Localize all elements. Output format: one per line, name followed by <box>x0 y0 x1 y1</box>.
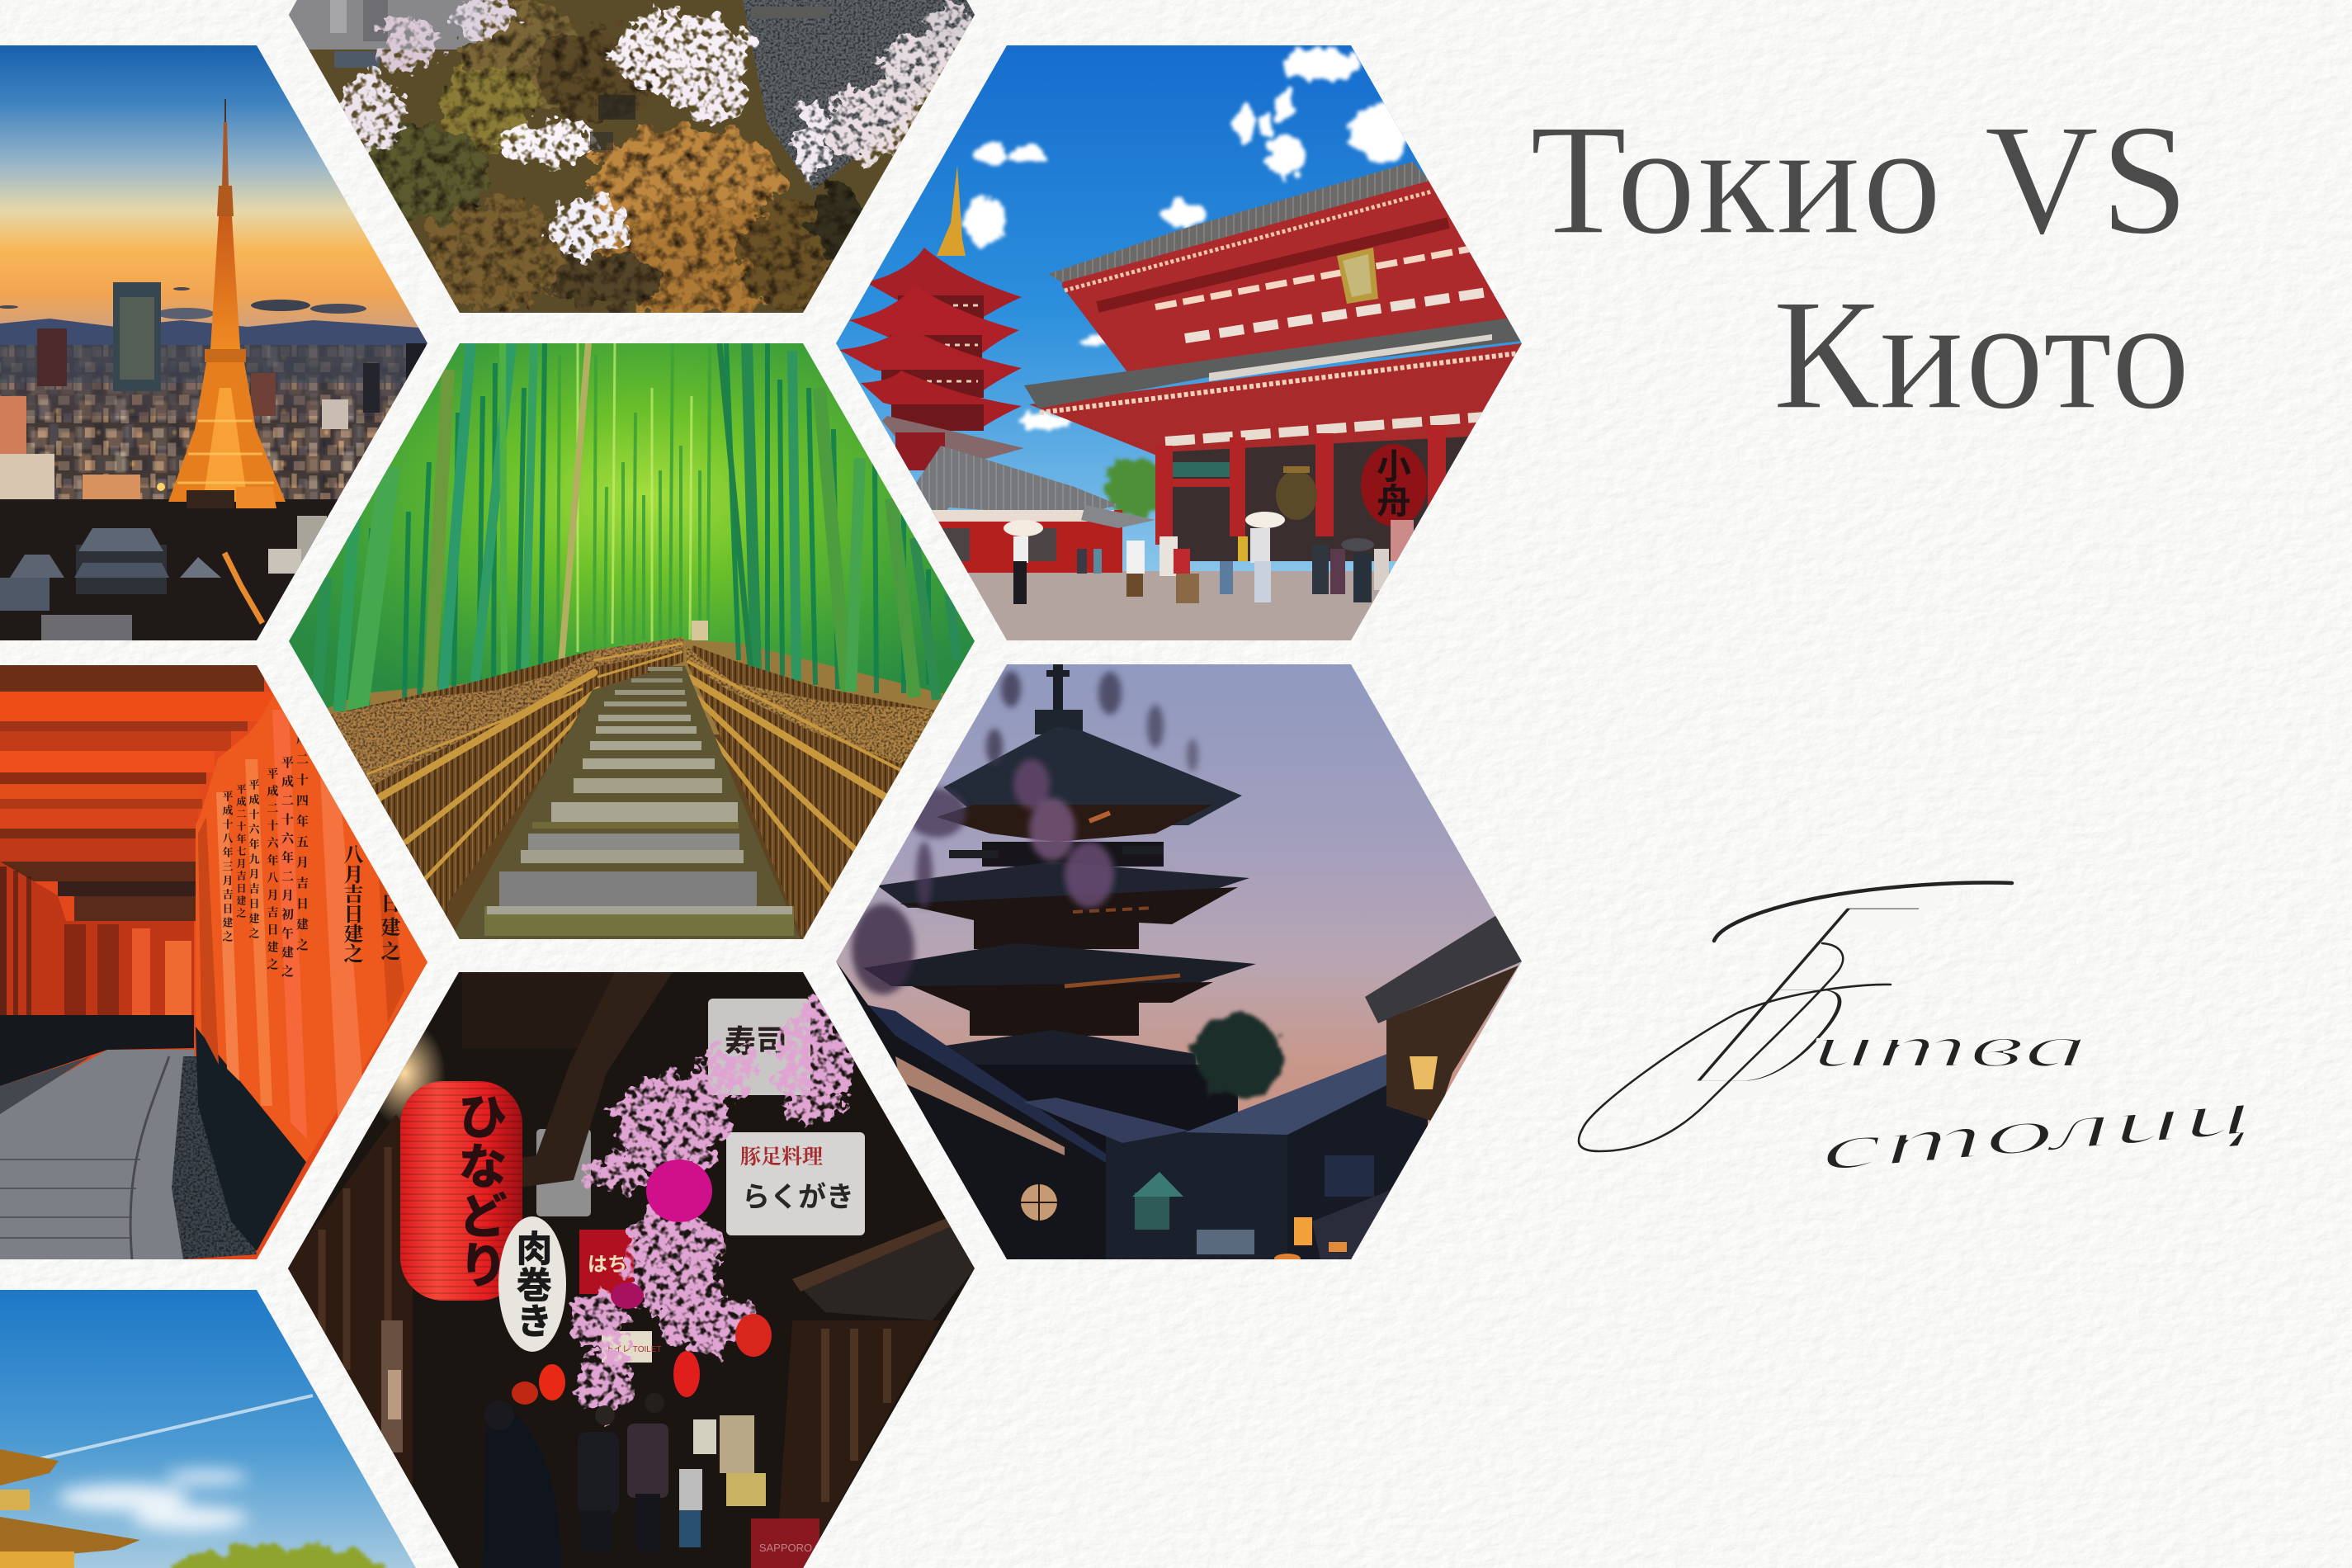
bamboo stalks <box>318 343 957 711</box>
ground behind the stalks <box>285 640 975 743</box>
pillar inscriptions: 日建之 <box>377 893 400 965</box>
hanging signs <box>579 999 865 1363</box>
five-storey pagoda <box>839 165 1024 470</box>
right foreground houses <box>1023 914 1522 1263</box>
contrail and clouds <box>38 1396 313 1530</box>
big red lantern <box>400 1081 522 1301</box>
small shop signs and crate <box>679 1415 819 1568</box>
golden pavilion roofs <box>0 1449 140 1568</box>
right shop awnings and walls <box>776 1217 975 1568</box>
hanging lanterns <box>1276 444 1427 527</box>
main gate, lower roof and body <box>1024 318 1522 561</box>
railing at castle top <box>751 7 829 18</box>
script word one: Б <box>1613 837 2011 1150</box>
dark foreground with temple <box>0 483 338 640</box>
ground <box>966 571 1527 645</box>
stone wall <box>743 0 978 190</box>
script word two: итва <box>1811 1013 2088 1079</box>
stone path <box>0 1050 195 1259</box>
low temple hall <box>914 446 1155 573</box>
treetops <box>173 1547 388 1568</box>
photo hexagon: pagoda street in Kyoto at dusk <box>834 660 1527 1263</box>
right row of gate pillars <box>196 665 427 1251</box>
pillar inscriptions: 平成二十六年八月吉日建之 <box>266 767 279 975</box>
hanging lanterns: 舟 <box>1377 482 1411 521</box>
distant city <box>285 0 483 68</box>
photo hexagon: Arashiyama bamboo path <box>285 338 978 941</box>
photo hexagon: Senso-ji temple in Asakusa <box>834 41 1527 645</box>
pillar inscriptions: 平成十六年九月吉日建之 <box>248 778 259 942</box>
pine tree <box>1192 1015 1282 1098</box>
ground beneath the fences <box>285 734 978 941</box>
ceiling beams <box>0 665 272 921</box>
decorative swashes <box>1579 883 2012 1151</box>
pillar inscriptions: 成二十四年五月吉日建之 <box>295 731 309 959</box>
left wooden wall <box>285 1114 459 1568</box>
sunset sky <box>0 45 429 330</box>
pillar inscriptions: 平成二十六年二月初午建之 <box>279 756 294 984</box>
pillar inscriptions <box>221 731 400 984</box>
stone stairs <box>598 95 635 120</box>
right hedge fence <box>686 645 978 939</box>
photo hexagon: castle hillside with cherry blossoms <box>285 0 978 318</box>
handwritten subtitle <box>1579 837 2255 1184</box>
small shrine sign <box>692 621 708 640</box>
crowd of visitors <box>1004 512 1414 604</box>
pillar inscriptions: 八月吉日建之 <box>340 844 363 963</box>
hanging signs: 寿司 <box>725 1025 787 1060</box>
Tokyo Tower <box>168 99 286 508</box>
white lantern <box>498 1216 566 1352</box>
main gate, upper roof and body <box>1048 162 1522 380</box>
title line 2: Киото <box>1773 267 2190 442</box>
script word three: столиц <box>1817 1077 2255 1184</box>
pagoda silhouette <box>863 664 1256 1155</box>
clouds <box>962 48 1410 429</box>
left foreground house <box>836 961 1114 1259</box>
pink and small red lanterns <box>512 1159 772 1405</box>
tree <box>1106 457 1165 517</box>
big red lantern: ひなどり <box>451 1091 507 1289</box>
photo hexagon: Kinkaku-ji golden pavilion <box>0 1290 421 1568</box>
hanging signs: らくがき <box>742 1181 854 1213</box>
photo hexagon: Omoide Yokocho alley with lanterns <box>285 970 978 1568</box>
gravel <box>172 1056 257 1259</box>
upper warm glow <box>363 1019 446 1126</box>
white lantern: 肉巻き <box>510 1230 553 1339</box>
distant mountains and clouds <box>0 287 429 355</box>
pillar inscriptions: 平成二十年七月吉日建之 <box>235 783 247 920</box>
small shop signs and crate: SAPPORO <box>759 1542 812 1554</box>
blurred cherry blossoms <box>852 671 1198 994</box>
photo hexagon: Fushimi Inari torii tunnel <box>0 665 429 1259</box>
hanging signs: 豚足料理 <box>740 1145 823 1169</box>
cherry blossom branches <box>567 1003 850 1415</box>
roof beam and branch <box>462 972 673 1216</box>
hanging lanterns: 小 <box>1377 447 1411 486</box>
photo hexagon: Tokyo Tower at sunset <box>0 45 437 644</box>
title line 1: Токио VS <box>1530 92 2189 267</box>
title <box>1530 92 2190 442</box>
pillar inscriptions: 平成十八年三月吉日建之 <box>221 790 233 945</box>
cherry blossoms <box>338 0 972 257</box>
left row of gates <box>0 862 194 1086</box>
hanging signs: トイレ TOILET <box>606 1345 662 1354</box>
tree masses <box>371 4 875 318</box>
dense city <box>0 282 437 510</box>
stone steps path <box>450 666 801 939</box>
left hedge fence <box>285 637 683 941</box>
crowd <box>483 1393 668 1568</box>
glowing lanterns and round window <box>1274 1056 1438 1263</box>
hanging signs: はち <box>588 1254 627 1276</box>
